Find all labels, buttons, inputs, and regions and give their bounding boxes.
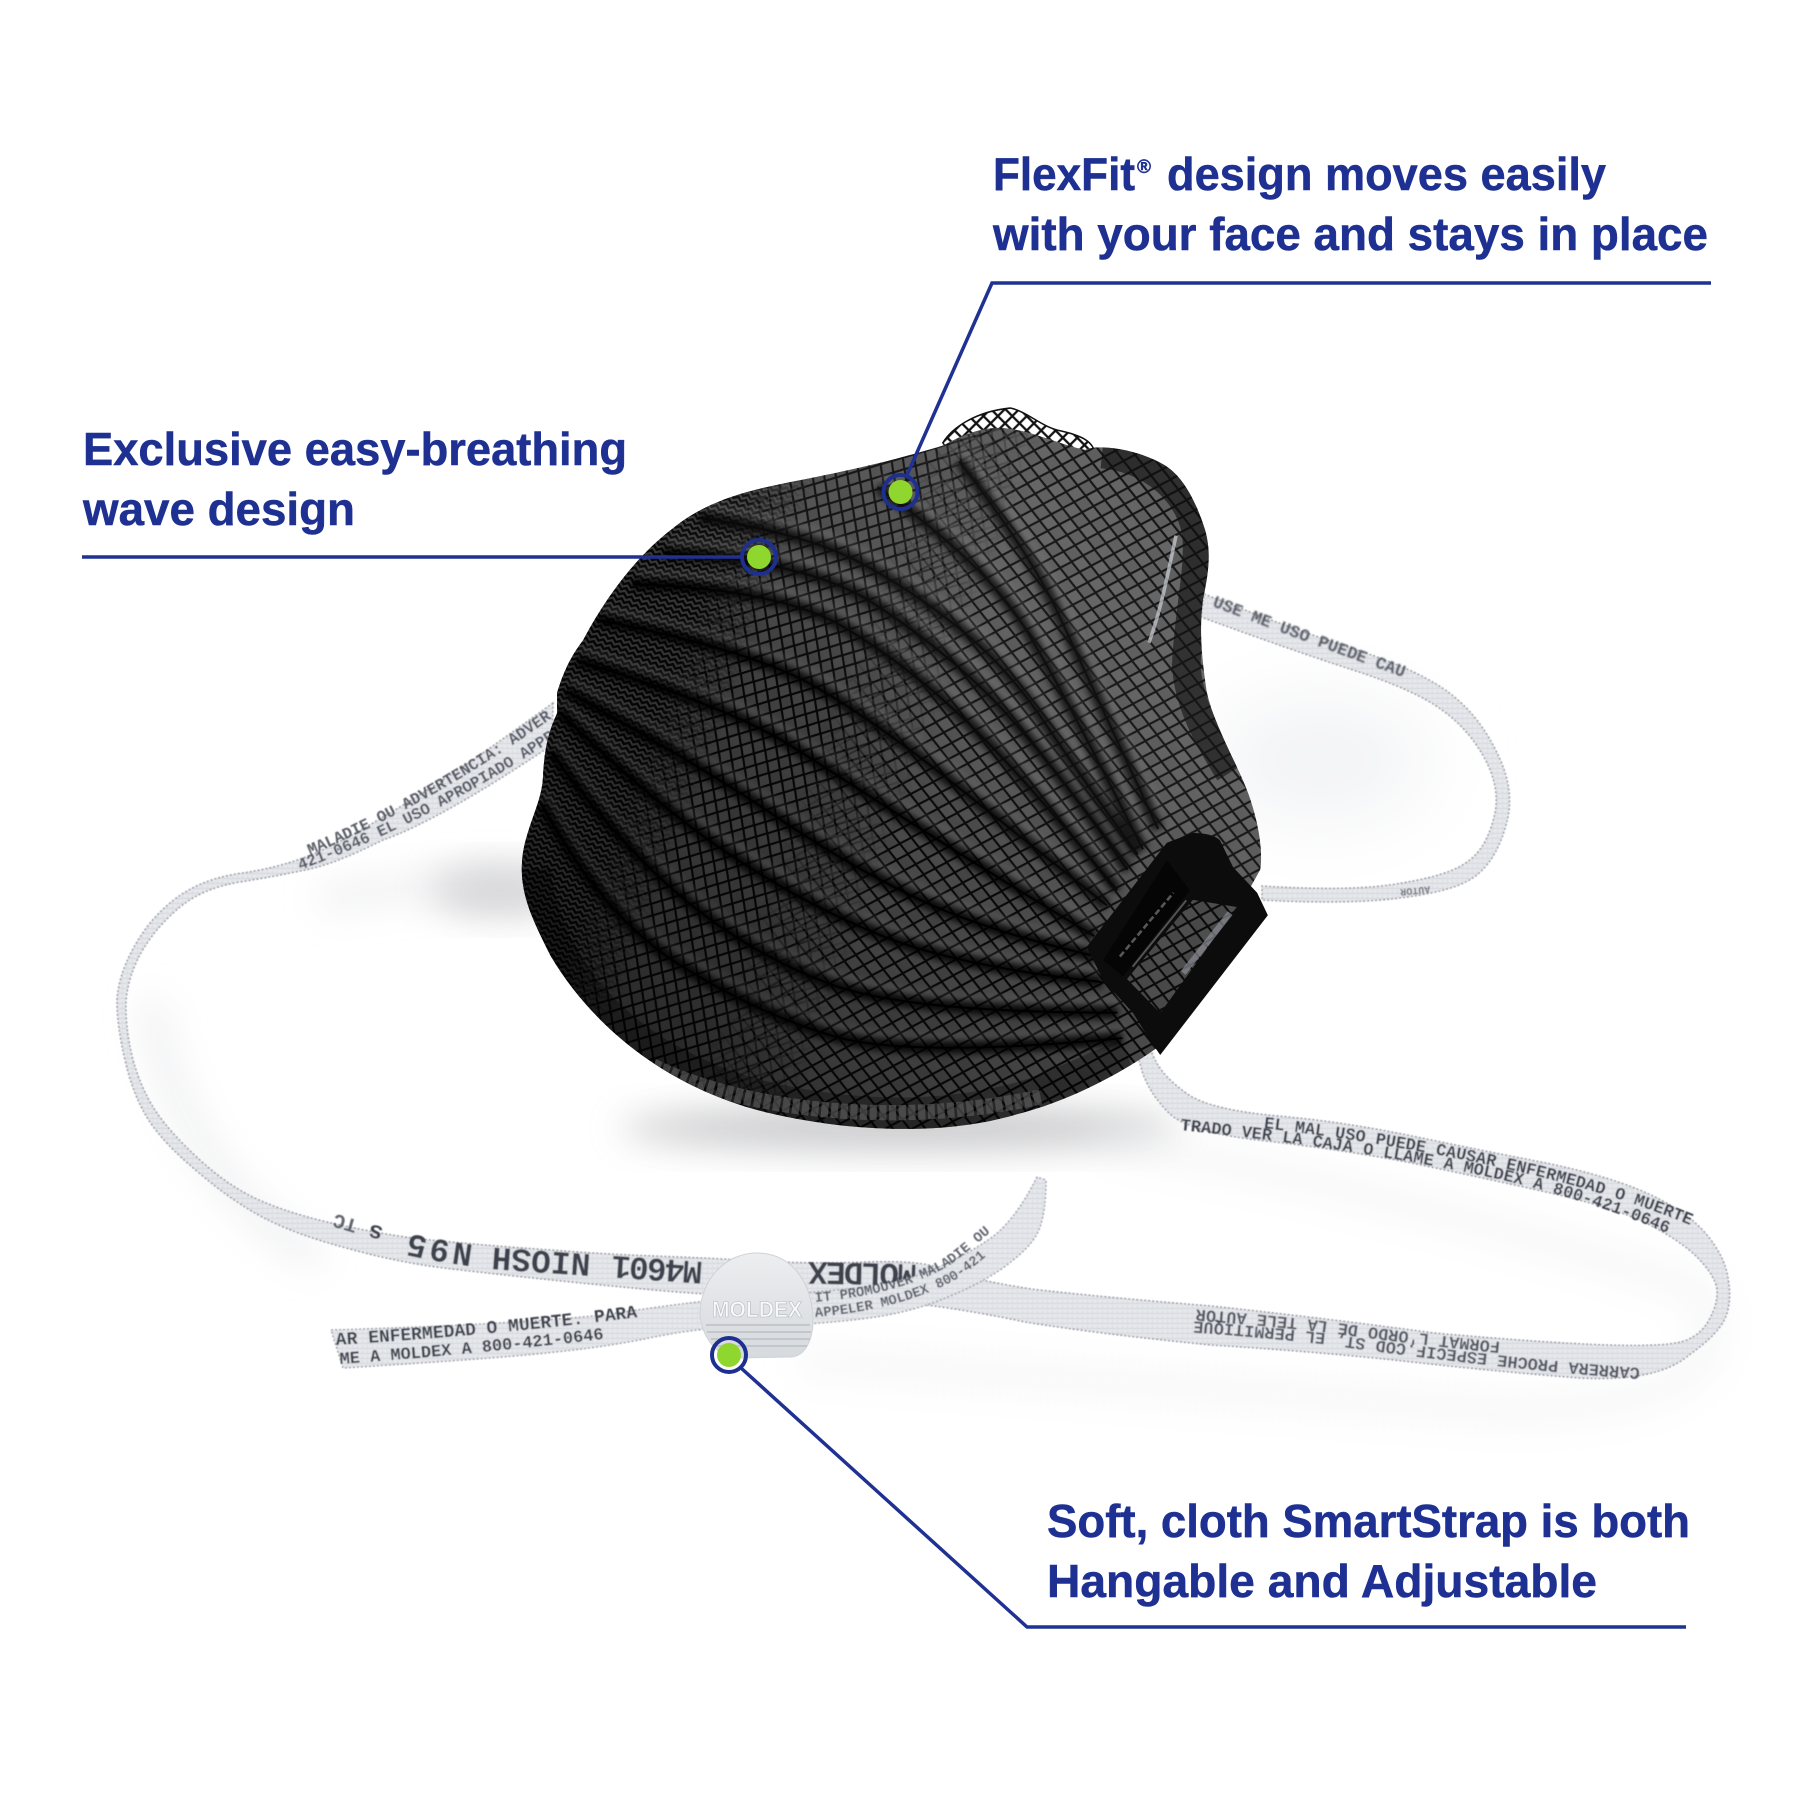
back right strap <box>1202 593 1511 904</box>
mottled lower panel <box>1127 900 1237 1013</box>
marker dot <box>884 475 918 509</box>
strap print: CARRERA PROCHE ESPECIF.COD ST, EL PERMITIQUE <box>1193 1319 1640 1380</box>
marker dot <box>712 1338 746 1372</box>
mask body <box>522 428 1262 1129</box>
right ear band <box>1102 454 1230 773</box>
callout: wave design <box>82 423 776 574</box>
heading text <box>82 423 627 535</box>
adjuster tail strap: APPELER MOLDEX 800-421 <box>814 1250 986 1318</box>
heading text: wave design <box>82 483 355 535</box>
respirator mask <box>522 407 1268 1129</box>
adjuster tail strap: IT PROMOUVER MALADIE OU <box>814 1225 990 1302</box>
heading text: Exclusive easy-breathing <box>83 423 627 475</box>
second line of FlexFit heading: with your face and stays in place <box>992 208 1708 260</box>
adjuster tail strap: ME A MOLDEX A 800-421-0646 <box>339 1328 604 1364</box>
marker dot <box>742 540 776 574</box>
strap print <box>298 710 1694 1380</box>
callout: FlexFit <box>884 148 1711 509</box>
pleat shadows <box>541 462 1158 1048</box>
buckle logo: MOLDEX <box>712 1297 802 1322</box>
adjuster buckle <box>700 1253 813 1358</box>
adjuster tail strap <box>330 1176 1048 1370</box>
heading text: FlexFit <box>993 148 1135 200</box>
adjuster tail strap: AR ENFERMEDAD O MUERTE. PARA <box>336 1305 638 1346</box>
back right strap: USE ME USO PUEDE CAUSAR <box>1213 595 1407 677</box>
strap print: EL MAL USO PUEDE CAUSAR ENFERMEDAD O MUERTE. PAR <box>1264 1116 1694 1226</box>
strap print: M4601 <box>612 1255 702 1284</box>
leader line <box>741 1368 1686 1627</box>
nose mesh <box>943 408 1094 467</box>
strap print: s <box>369 1224 383 1240</box>
strap print: TRADO VER LA CAJA O LLAME A MOLDEX A 800-421-0646 <box>1181 1118 1670 1232</box>
heading text: ® <box>1137 157 1151 178</box>
strap print: N95 <box>407 1234 472 1267</box>
callout: SmartStrap <box>712 1338 1690 1627</box>
heading text <box>1047 1495 1690 1607</box>
heading text: design moves easily <box>1167 148 1606 200</box>
heading text: Hangable and Adjustable <box>1047 1555 1597 1607</box>
strap print: FORMAT L'ORDO DE LA TELE AUTOR <box>1196 1309 1500 1354</box>
back right strap: AUTOR <box>1400 886 1430 896</box>
strap print: NIOSH <box>492 1247 590 1276</box>
strap slot <box>1103 860 1190 976</box>
leader line <box>82 555 742 559</box>
main strap: left loop, bottom run and right loop <box>116 702 1731 1380</box>
strap print: MOLDEX <box>808 1261 916 1286</box>
strap print: 421-0646 EL USO APROPIADO APPR <box>298 730 550 868</box>
pleat lines <box>541 462 1158 1048</box>
strap bracket <box>1087 833 1268 1055</box>
strap print: TC <box>332 1214 356 1234</box>
strap print: MALADIE OU ADVERTENCIA: ADVERT <box>306 710 552 856</box>
ground shadows <box>150 700 1711 1410</box>
leader line <box>907 283 1711 475</box>
heading text: Soft, cloth SmartStrap is both <box>1047 1495 1690 1547</box>
bottom rim <box>533 870 1128 1115</box>
pleat highlights <box>545 450 1162 1037</box>
